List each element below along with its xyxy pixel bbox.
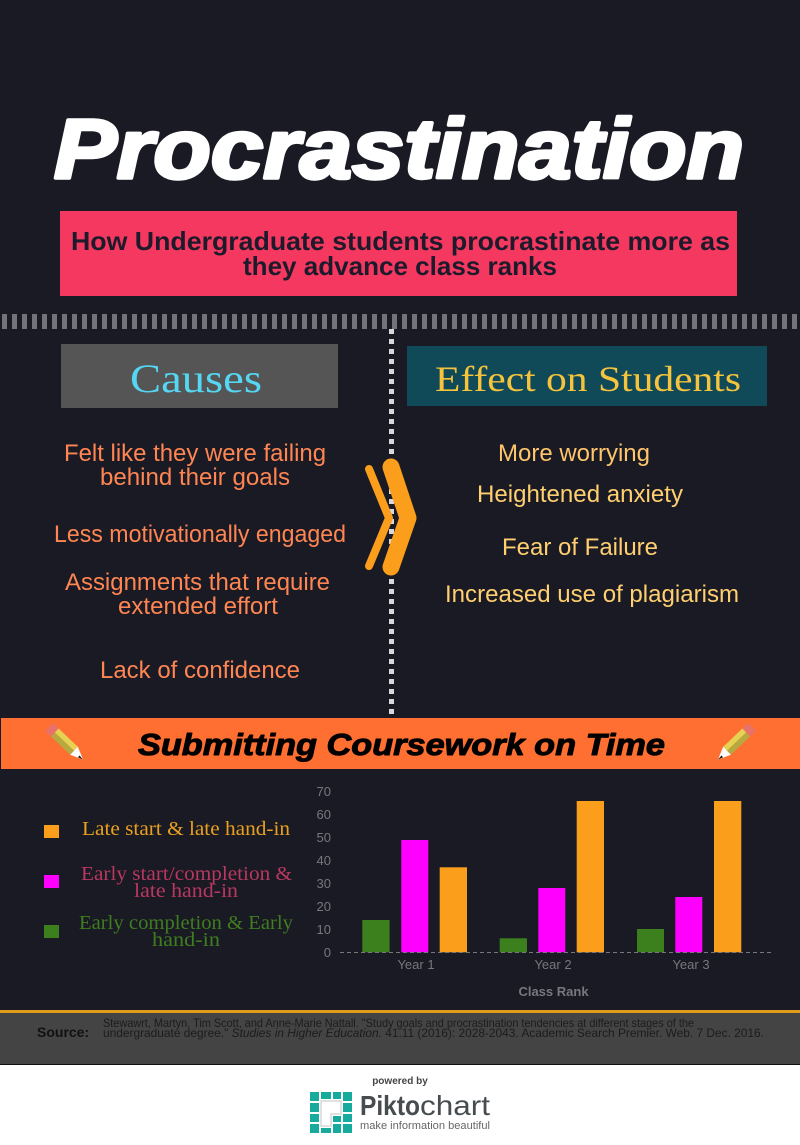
effect: worrying: More worrying xyxy=(498,440,650,467)
legend: early start: Early start/completion & xyxy=(81,863,292,885)
subtitle banner xyxy=(60,211,737,296)
y axis labels: 70 xyxy=(317,784,331,799)
legend xyxy=(44,818,293,951)
piktochart wordmark xyxy=(360,1090,490,1121)
source panel: undergraduate degree." Studies in Higher Education. 41.11 (2016): 2028-2043. Academic Search Premier. Web. 7 Dec. 2016. xyxy=(103,1026,764,1040)
effect: plagiarism: Increased use of plagiarism xyxy=(445,581,739,608)
icon: left pencil xyxy=(45,723,83,760)
subtitle banner: How Undergraduate students procrastinate more as xyxy=(71,226,730,256)
title: Procrastination xyxy=(54,102,744,196)
legend: early completion: Early completion & Early xyxy=(79,912,293,934)
cause: extended effort xyxy=(65,569,330,620)
legend: early completion: hand-in xyxy=(152,929,220,951)
legend: early start: late hand-in xyxy=(134,880,238,902)
icon: piktochart logo xyxy=(310,1092,352,1133)
x axis title: Class Rank xyxy=(518,984,589,999)
panel: effects xyxy=(407,346,767,608)
x axis labels xyxy=(397,957,710,972)
bar chart xyxy=(317,784,771,999)
x axis labels: Year 1 xyxy=(397,957,435,972)
y axis labels: 60 xyxy=(317,807,331,822)
section banner: submitting coursework xyxy=(1,718,800,769)
bars: year 1 xyxy=(362,840,467,952)
legend: early start xyxy=(44,863,292,902)
cause: failing behind goals xyxy=(64,440,326,491)
legend: late start: Late start & late hand-in xyxy=(82,818,290,840)
y axis labels: 30 xyxy=(317,876,331,891)
icon: double chevron arrow xyxy=(369,467,408,567)
source panel: Stewawrt, Martyn, Tim Scott, and Anne-Marie Nattall. "Study goals and procrastination tendencies at different stages of the xyxy=(103,1016,694,1030)
bars: year 3 xyxy=(637,801,741,952)
cause: failing behind goals: Felt like they were failing xyxy=(64,440,326,467)
panel: causes xyxy=(54,344,346,684)
icon: right pencil xyxy=(718,723,756,760)
footer xyxy=(0,1065,800,1145)
bars: year 2 xyxy=(500,801,604,952)
source panel: Source: xyxy=(37,1024,89,1040)
x axis labels: Year 2 xyxy=(534,957,572,972)
legend: early completion xyxy=(44,912,293,951)
subtitle banner: they advance class ranks xyxy=(243,251,557,281)
causes heading: Causes xyxy=(130,356,262,401)
effect: anxiety: Heightened anxiety xyxy=(477,481,683,508)
x axis labels: Year 3 xyxy=(672,957,710,972)
powered by: powered by xyxy=(372,1076,428,1087)
cause: extended effort: extended effort xyxy=(118,593,278,620)
y axis labels: 20 xyxy=(317,899,331,914)
cause: extended effort: Assignments that require xyxy=(65,569,330,596)
cause: failing behind goals: behind their goals xyxy=(100,464,290,491)
cause: lack of confidence: Lack of confidence xyxy=(100,657,300,684)
piktochart wordmark: Pikto xyxy=(360,1090,420,1121)
causes heading xyxy=(61,344,338,408)
effects heading: Effect on Students xyxy=(435,359,741,399)
effect: fear of failure: Fear of Failure xyxy=(502,534,658,561)
effects heading xyxy=(407,346,767,406)
section banner: submitting coursework: Submitting Coursework on Time xyxy=(138,727,665,762)
piktochart wordmark: chart xyxy=(420,1090,490,1121)
source panel xyxy=(0,1010,800,1065)
y axis labels xyxy=(317,784,331,960)
y axis labels: 10 xyxy=(317,922,331,937)
cause: less motivation: Less motivationally engaged xyxy=(54,521,346,548)
tagline: make information beautiful xyxy=(360,1120,490,1132)
y axis labels: 0 xyxy=(324,945,331,960)
y axis labels: 50 xyxy=(317,830,331,845)
y axis labels: 40 xyxy=(317,853,331,868)
